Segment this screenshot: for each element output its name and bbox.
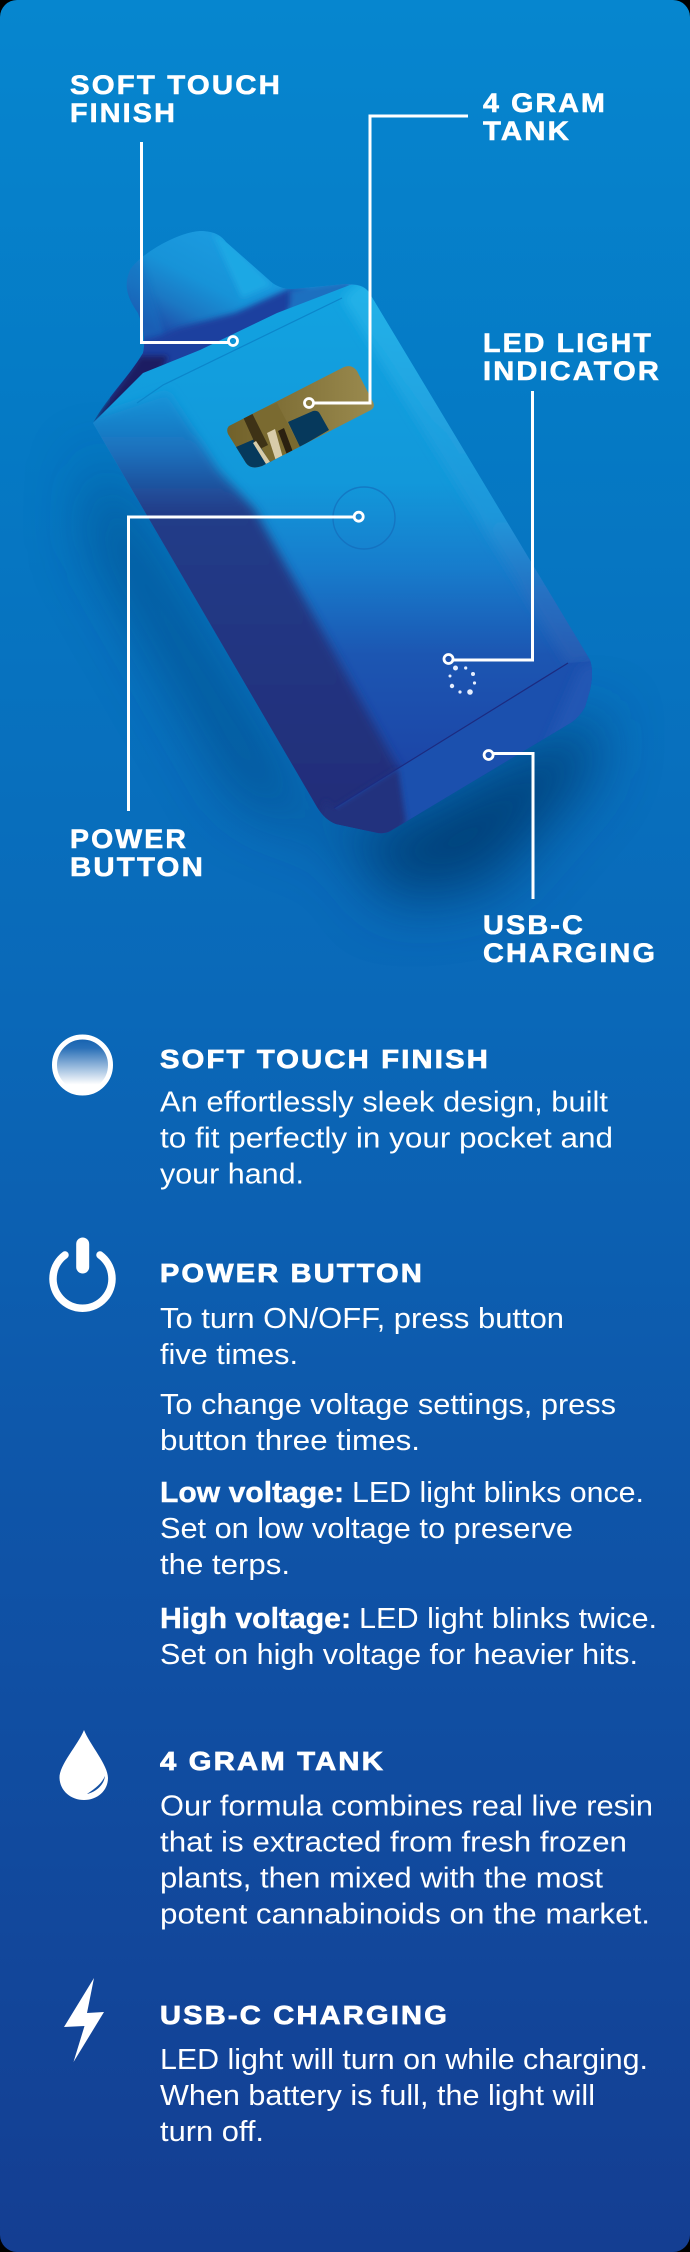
section: power button: Set on high voltage for heavier hits. bbox=[160, 1639, 638, 1671]
callout: power button: BUTTON bbox=[70, 852, 205, 882]
callout: 4 gram tank: TANK bbox=[483, 116, 571, 146]
device shadow bbox=[90, 450, 600, 900]
seam lines bbox=[137, 298, 342, 403]
right chamfer bbox=[346, 286, 590, 660]
device body bbox=[93, 285, 592, 834]
section: power button: To turn ON/OFF, press button bbox=[160, 1303, 564, 1335]
section: 4 gram tank: 4 GRAM TANK bbox=[160, 1746, 385, 1776]
section: power button: High voltage: bbox=[160, 1603, 351, 1635]
callout: USB-C charging: USB-C bbox=[483, 910, 585, 940]
callout: LED light indicator: INDICATOR bbox=[483, 356, 661, 386]
section: power button: POWER BUTTON bbox=[160, 1258, 424, 1288]
callout: 4 gram tank: 4 GRAM bbox=[483, 88, 607, 118]
callout: 4 gram tank bbox=[304, 88, 607, 408]
section: USB-C charging: LED light will turn on while charging. bbox=[160, 2044, 648, 2076]
section: power button: five times. bbox=[160, 1339, 298, 1371]
collar shadow bbox=[140, 288, 306, 362]
section: 4 gram tank bbox=[160, 1746, 653, 1930]
callout: soft touch finish bbox=[70, 70, 282, 346]
section: soft touch finish bbox=[160, 1044, 613, 1190]
tank window bbox=[227, 366, 374, 468]
bottom face bbox=[335, 662, 575, 834]
callout: LED light indicator: LED LIGHT bbox=[483, 328, 653, 358]
power button on device bbox=[333, 487, 395, 549]
icon: lightning bolt bbox=[64, 1978, 104, 2062]
side face bbox=[94, 396, 402, 830]
section: power button: To change voltage settings, press bbox=[160, 1389, 616, 1421]
callout: soft touch finish: FINISH bbox=[70, 98, 177, 128]
LED light ring bbox=[448, 666, 476, 695]
section: power button: the terps. bbox=[160, 1549, 290, 1581]
section: power button: Set on low voltage to preserve bbox=[160, 1513, 573, 1545]
icon: soft touch ball bbox=[54, 1037, 110, 1093]
section: 4 gram tank: plants, then mixed with the most bbox=[160, 1862, 603, 1894]
section: soft touch finish: An effortlessly sleek design, built bbox=[160, 1086, 608, 1118]
callout: USB-C charging: CHARGING bbox=[483, 938, 657, 968]
icon: power bbox=[53, 1244, 112, 1308]
mouthpiece bbox=[110, 231, 368, 402]
section: soft touch finish: your hand. bbox=[160, 1158, 304, 1190]
section: soft touch finish: to fit perfectly in your pocket and bbox=[160, 1122, 613, 1154]
section: soft touch finish: SOFT TOUCH FINISH bbox=[160, 1044, 490, 1074]
section: 4 gram tank: that is extracted from fresh frozen bbox=[160, 1826, 627, 1858]
section: power button: Low voltage: bbox=[160, 1477, 344, 1509]
section: power button: LED light blinks twice. bbox=[359, 1603, 657, 1635]
section: 4 gram tank: Our formula combines real live resin bbox=[160, 1790, 653, 1822]
section: power button: LED light blinks once. bbox=[352, 1477, 644, 1509]
section: power button bbox=[160, 1258, 657, 1671]
section: USB-C charging: USB-C CHARGING bbox=[160, 2000, 449, 2030]
callout: power button: POWER bbox=[70, 824, 188, 854]
callout: soft touch finish: SOFT TOUCH bbox=[70, 70, 282, 100]
callout: USB-C charging bbox=[483, 750, 657, 968]
icon: drop bbox=[59, 1730, 108, 1800]
section: USB-C charging: turn off. bbox=[160, 2116, 264, 2148]
section: USB-C charging bbox=[160, 2000, 648, 2148]
callout: power button bbox=[70, 512, 363, 882]
device illustration bbox=[94, 231, 368, 422]
callout: LED light indicator bbox=[444, 328, 661, 664]
section: 4 gram tank: potent cannabinoids on the market. bbox=[160, 1898, 650, 1930]
section: USB-C charging: When battery is full, the light will bbox=[160, 2080, 595, 2112]
section: power button: button three times. bbox=[160, 1425, 420, 1457]
